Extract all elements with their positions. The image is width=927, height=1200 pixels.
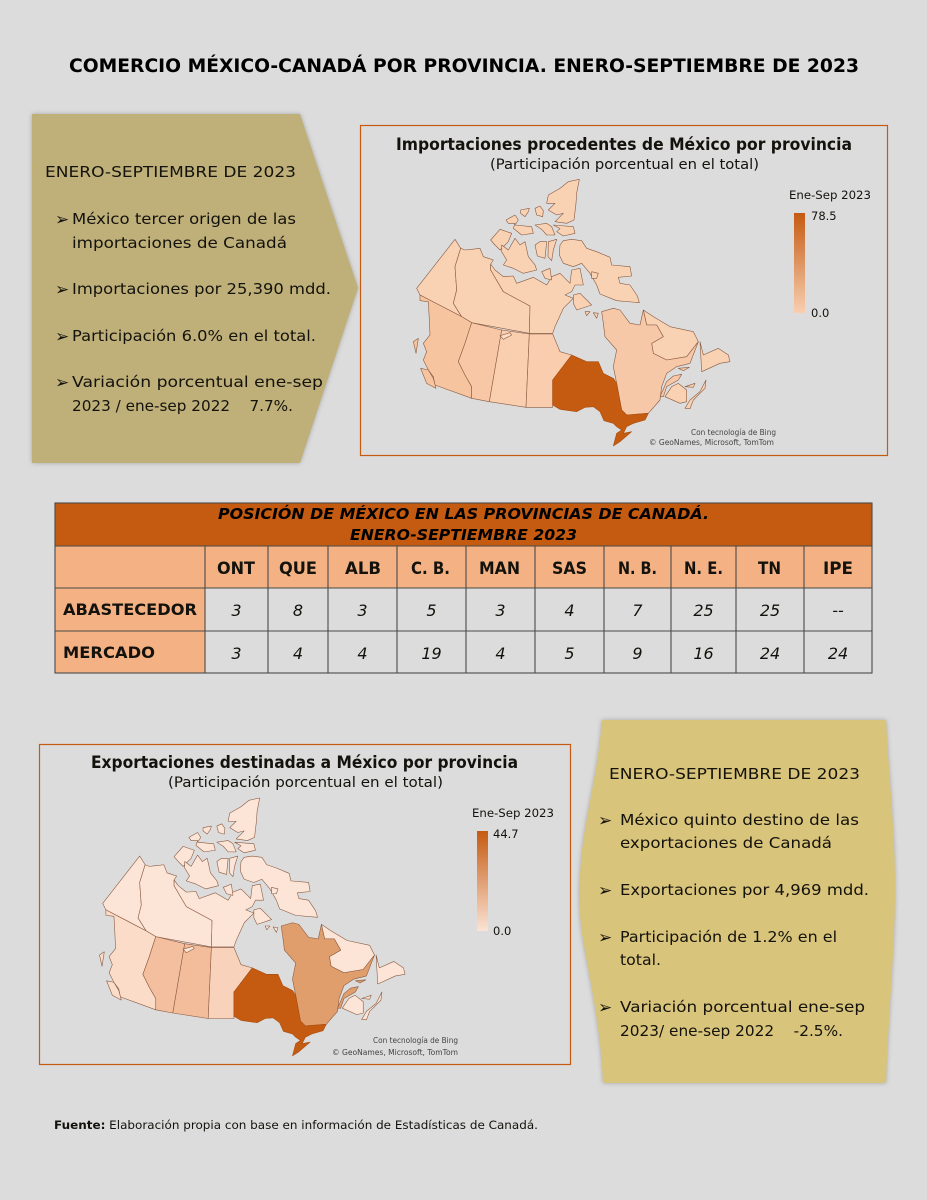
panel: imports summary arrow: ➢ bbox=[55, 373, 69, 393]
panel: exports summary: total. bbox=[620, 951, 661, 969]
table column headers: N. B. bbox=[618, 559, 657, 578]
table title: ENERO-SEPTIEMBRE 2023 bbox=[350, 526, 577, 544]
exports legend: Ene-Sep 2023 bbox=[472, 806, 554, 820]
panel: imports summary arrow: Importaciones por 25,390 mdd. bbox=[72, 280, 331, 298]
table row: mercado: 3 bbox=[231, 644, 242, 663]
imports map attribution bbox=[649, 428, 776, 447]
table row: mercado: 9 bbox=[632, 644, 643, 663]
table column headers: N. E. bbox=[684, 559, 723, 578]
imports choropleth map bbox=[413, 179, 730, 446]
table column headers: TN bbox=[758, 559, 781, 578]
imports legend: Ene-Sep 2023 bbox=[789, 188, 871, 202]
table column headers bbox=[217, 559, 853, 578]
panel: imports summary arrow: ➢ bbox=[55, 280, 69, 300]
table row: abastecedor: 3 bbox=[495, 601, 506, 620]
table column headers: IPE bbox=[823, 559, 853, 578]
panel: exports summary: Exportaciones por 4,969 mdd. bbox=[620, 881, 869, 899]
table row: abastecedor: -- bbox=[832, 601, 844, 620]
panel: exports summary: México quinto destino de las bbox=[620, 811, 859, 829]
panel: imports summary arrow: 2023 / ene-sep 2022 7.7%. bbox=[72, 397, 293, 415]
table row: mercado: 4 bbox=[293, 644, 303, 663]
panel: exports summary: 2023/ ene-sep 2022 -2.5%. bbox=[620, 1022, 843, 1040]
table title bbox=[218, 504, 709, 544]
imports legend bbox=[789, 188, 871, 320]
table column headers: SAS bbox=[552, 559, 587, 578]
imports map heading: Importaciones procedentes de México por provincia bbox=[396, 135, 852, 155]
imports map subtitle: (Participación porcentual en el total) bbox=[490, 157, 759, 173]
table: Mexico position by province bbox=[55, 503, 872, 673]
panel: exports summary: ENERO-SEPTIEMBRE DE 2023 bbox=[609, 765, 860, 783]
table row: abastecedor: 7 bbox=[632, 601, 643, 620]
panel: exports summary bbox=[580, 720, 895, 1083]
exports map subtitle: (Participación porcentual en el total) bbox=[168, 775, 443, 791]
table row: mercado bbox=[63, 643, 848, 663]
table row: abastecedor: 3 bbox=[357, 601, 368, 620]
imports legend: 78.5 bbox=[811, 209, 837, 223]
exports legend bbox=[472, 806, 554, 938]
panel: exports map bbox=[40, 744, 570, 1064]
table row: abastecedor: ABASTECEDOR bbox=[63, 600, 197, 619]
table title: POSICIÓN DE MÉXICO EN LAS PROVINCIAS DE CANADÁ. bbox=[218, 504, 709, 523]
source note: Fuente: Elaboración propia con base en información de Estadísticas de Canadá. bbox=[54, 1118, 538, 1132]
panel: exports summary: Variación porcentual ene-sep bbox=[620, 998, 865, 1016]
exports map attribution: © GeoNames, Microsoft, TomTom bbox=[332, 1048, 458, 1057]
panel: imports summary arrow: importaciones de Canadá bbox=[72, 234, 287, 252]
panel: imports summary arrow: Participación 6.0% en el total. bbox=[72, 327, 316, 345]
table row: mercado: 4 bbox=[495, 644, 506, 663]
panel: exports summary: ➢ bbox=[598, 928, 612, 948]
table column headers: MAN bbox=[479, 559, 520, 578]
panel: imports map bbox=[360, 126, 888, 456]
table row: abastecedor: 5 bbox=[426, 601, 437, 620]
table row: mercado: 24 bbox=[760, 644, 780, 663]
panel: imports summary arrow: ENERO-SEPTIEMBRE DE 2023 bbox=[45, 163, 296, 181]
table row: abastecedor: 4 bbox=[564, 601, 575, 620]
table row: abastecedor: 25 bbox=[693, 601, 714, 620]
table row: mercado: 19 bbox=[421, 644, 442, 663]
table column headers: ALB bbox=[345, 559, 381, 578]
imports map attribution: © GeoNames, Microsoft, TomTom bbox=[649, 438, 774, 447]
panel: exports summary: Participación de 1.2% en el bbox=[620, 928, 837, 946]
table row: mercado: 5 bbox=[564, 644, 575, 663]
panel: imports summary arrow: México tercer origen de las bbox=[72, 210, 296, 228]
panel: imports summary arrow: ➢ bbox=[55, 327, 69, 347]
panel: exports summary: ➢ bbox=[598, 811, 612, 831]
table column headers: C. B. bbox=[411, 559, 450, 578]
table row: abastecedor: 25 bbox=[760, 601, 780, 620]
panel: exports summary: exportaciones de Canadá bbox=[620, 834, 832, 852]
table row: mercado: MERCADO bbox=[63, 643, 155, 662]
exports legend: 0.0 bbox=[493, 924, 511, 938]
table row: mercado: 16 bbox=[693, 644, 714, 663]
title: COMERCIO MÉXICO-CANADÁ POR PROVINCIA. ENERO-SEPTIEMBRE DE 2023 bbox=[69, 55, 859, 77]
table row: abastecedor: 3 bbox=[231, 601, 242, 620]
table column headers: QUE bbox=[279, 559, 317, 578]
table row: mercado: 4 bbox=[357, 644, 368, 663]
panel: imports summary arrow bbox=[32, 114, 358, 463]
panel: imports summary arrow: Variación porcentual ene-sep bbox=[72, 373, 323, 391]
imports map attribution: Con tecnología de Bing bbox=[691, 428, 776, 437]
table row: abastecedor: 8 bbox=[293, 601, 303, 620]
exports map attribution bbox=[332, 1036, 458, 1057]
table column headers: ONT bbox=[217, 559, 256, 578]
panel: imports summary arrow: ➢ bbox=[55, 210, 69, 230]
panel: exports summary: ➢ bbox=[598, 998, 612, 1018]
exports map heading: Exportaciones destinadas a México por provincia bbox=[91, 753, 518, 773]
exports legend: 44.7 bbox=[493, 827, 519, 841]
panel: exports summary: ➢ bbox=[598, 881, 612, 901]
table row: mercado: 24 bbox=[828, 644, 848, 663]
exports map attribution: Con tecnología de Bing bbox=[373, 1036, 458, 1045]
exports choropleth map bbox=[99, 798, 405, 1056]
table row: abastecedor bbox=[63, 600, 844, 620]
imports legend: 0.0 bbox=[811, 306, 829, 320]
